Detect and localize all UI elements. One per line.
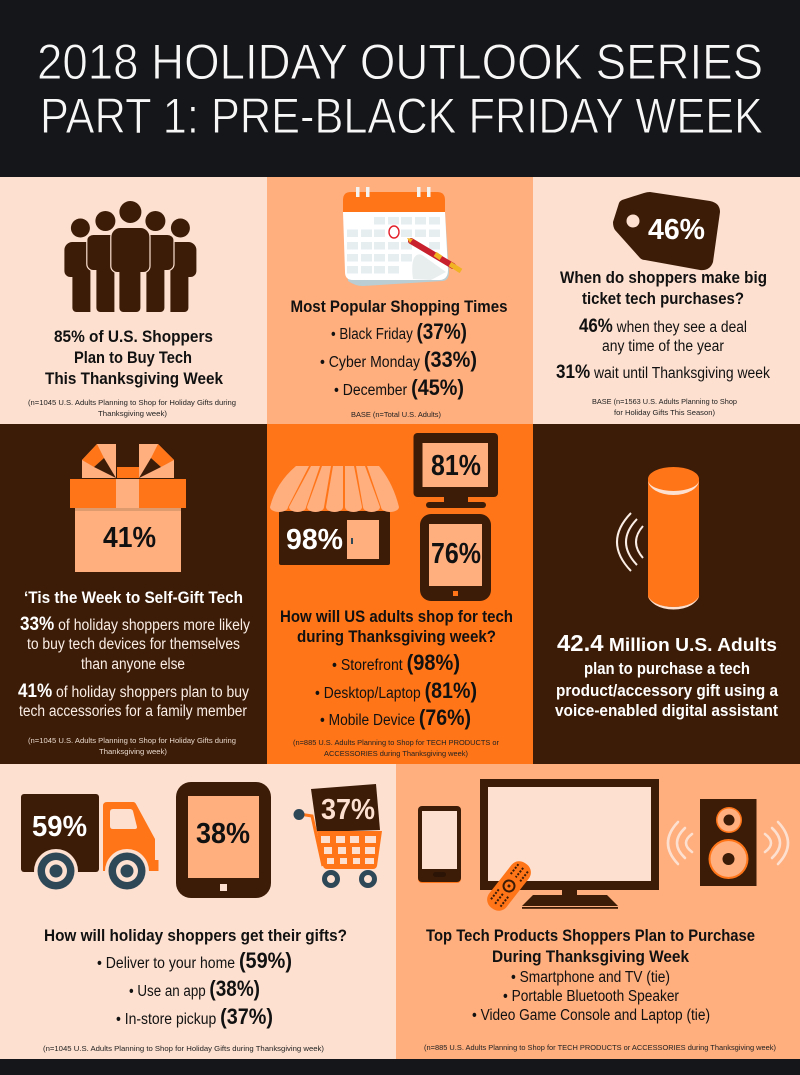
text: self-gift stats: 41% of holiday shoppers plan to buy (18, 681, 249, 702)
footnote (28, 398, 236, 418)
footnote: (n=885 U.S. Adults Planning to Shop for TECH PRODUCTS or (293, 738, 499, 747)
icon: storefront 98%: 98% (286, 524, 343, 556)
list: top products (472, 969, 710, 1024)
icon: gift box 41% (70, 444, 186, 572)
icon: storefront 98% (270, 466, 399, 565)
footnote: (n=1045 U.S. Adults Planning to Shop for Holiday Gifts during Thanksgiving week) (43, 1044, 325, 1053)
heading: 85% of U.S. shoppers (45, 328, 224, 388)
heading: how adults shop: during Thanksgiving week? (297, 628, 496, 646)
list: shopping times: • December (45%) (334, 375, 464, 400)
list: shopping channels (315, 650, 477, 730)
icon: shopping cart 37%: 37% (321, 794, 375, 826)
list: delivery methods: • Deliver to your home (59%) (97, 948, 292, 973)
footnote: Thanksgiving week) (98, 409, 168, 418)
text: self-gift stats: 33% of holiday shoppers more likely (20, 614, 250, 635)
footnote: (n=1045 U.S. Adults Planning to Shop for Holiday Gifts during (28, 398, 236, 407)
list: top products: • Smartphone and TV (tie) (511, 969, 670, 986)
panel: self-gift tech (0, 424, 267, 764)
list: delivery methods: • Use an app (38%) (129, 976, 260, 1001)
heading: self-gift tech: ‘Tis the Week to Self-Gift Tech (24, 589, 243, 607)
footnote (293, 738, 499, 758)
panel: most popular shopping times (267, 177, 533, 424)
text: 46% and 31% stats: 46% when they see a deal (579, 316, 747, 337)
footnote: for Holiday Gifts This Season) (614, 408, 715, 417)
text: 46% and 31% stats (556, 316, 770, 383)
list: top products: • Video Game Console and Laptop (tie) (472, 1007, 710, 1024)
heading: big ticket: When do shoppers make big (560, 269, 767, 287)
icon: remote control (483, 857, 535, 915)
heading: big ticket (560, 269, 767, 308)
icon: tablet 38% (176, 782, 271, 898)
icon: delivery truck 59%: 59% (32, 811, 87, 843)
list: shopping times: • Black Friday (37%) (331, 319, 467, 344)
text: 42.4 million adults (555, 630, 779, 720)
list: shopping channels: • Storefront (98%) (332, 650, 460, 675)
list: shopping channels: • Desktop/Laptop (81%) (315, 678, 477, 703)
list: shopping times: • Cyber Monday (33%) (320, 347, 477, 372)
heading: 85% of U.S. shoppers: This Thanksgiving Week (45, 370, 224, 388)
icon: delivery truck 59% (21, 794, 158, 893)
footnote (592, 397, 737, 417)
icon: desktop monitor 81% (414, 433, 498, 508)
icon: group of people (64, 201, 196, 312)
icon: price tag 46%: 46% (648, 214, 705, 246)
text: 42.4 million adults: plan to purchase a tech (584, 660, 750, 678)
icon: television (480, 779, 659, 909)
list: delivery methods (97, 948, 292, 1029)
icon: shopping cart 37% (294, 784, 382, 886)
footnote: BASE (n=1563 U.S. Adults Planning to Shop (592, 397, 737, 406)
icon: desktop monitor 81%: 81% (431, 450, 481, 482)
text: 46% and 31% stats: any time of the year (602, 338, 724, 355)
icon: tablet 76%: 76% (431, 538, 481, 570)
text: self-gift stats: than anyone else (81, 656, 185, 673)
list: shopping times (320, 319, 477, 400)
heading: how adults shop: How will US adults shop for tech (280, 608, 513, 626)
panel: top tech products (396, 764, 800, 1059)
footnote: BASE (n=Total U.S. Adults) (351, 410, 441, 419)
text: 42.4 million adults: product/accessory gift using a (556, 682, 779, 700)
icon: calendar and pen (343, 187, 461, 286)
panel: big ticket purchases (533, 177, 800, 424)
text: self-gift stats (18, 614, 250, 720)
heading: how adults shop (280, 608, 513, 646)
heading: 85% of U.S. shoppers: 85% of U.S. Shoppers (54, 328, 213, 346)
heading: 85% of U.S. shoppers: Plan to Buy Tech (74, 349, 192, 367)
panel: 85% of shoppers (0, 177, 267, 424)
text: self-gift stats: to buy tech devices for themselves (27, 636, 240, 653)
header banner (0, 0, 800, 177)
heading: top tech products (426, 927, 755, 966)
heading: top tech products: During Thanksgiving Week (492, 948, 690, 966)
panel: how shoppers get gifts (0, 764, 396, 1059)
list: shopping channels: • Mobile Device (76%) (320, 705, 471, 730)
icon: speaker with sound waves (668, 799, 788, 886)
icon: tablet 38%: 38% (196, 818, 250, 850)
icon: smart speaker with sound waves (617, 467, 699, 609)
panel: how adults shop (267, 424, 533, 764)
panel: voice assistant (533, 424, 800, 764)
text: 42.4 million adults: voice-enabled digital assistant (555, 702, 778, 720)
heading: big ticket: ticket tech purchases? (582, 290, 744, 308)
list: delivery methods: • In-store pickup (37%) (116, 1004, 273, 1029)
text: 46% and 31% stats: 31% wait until Thanksgiving week (556, 362, 770, 383)
footnote: (n=885 U.S. Adults Planning to Shop for TECH PRODUCTS or ACCESSORIES during Thanksgiving week) (424, 1043, 776, 1052)
footnote (28, 736, 236, 756)
list: top products: • Portable Bluetooth Speaker (503, 988, 679, 1005)
icon: price tag 46% (613, 192, 720, 270)
title (37, 34, 763, 144)
footnote: Thanksgiving week) (99, 747, 168, 756)
text: self-gift stats: tech accessories for a family member (19, 703, 247, 720)
icon: gift box 41%: 41% (103, 522, 156, 554)
text: 42.4 million adults: 42.4 Million U.S. Adults (557, 630, 777, 656)
heading: how shoppers get gifts: How will holiday shoppers get their gifts? (44, 927, 347, 945)
icon: tablet 76% (420, 514, 491, 601)
footnote: (n=1045 U.S. Adults Planning to Shop for Holiday Gifts during (28, 736, 236, 745)
footnote: ACCESSORIES during Thanksgiving week) (324, 749, 468, 758)
footer band (0, 1059, 800, 1075)
heading: top tech products: Top Tech Products Shoppers Plan to Purchase (426, 927, 755, 945)
heading: most popular shopping times: Most Popular Shopping Times (290, 298, 508, 316)
icon: smartphone (418, 806, 461, 883)
